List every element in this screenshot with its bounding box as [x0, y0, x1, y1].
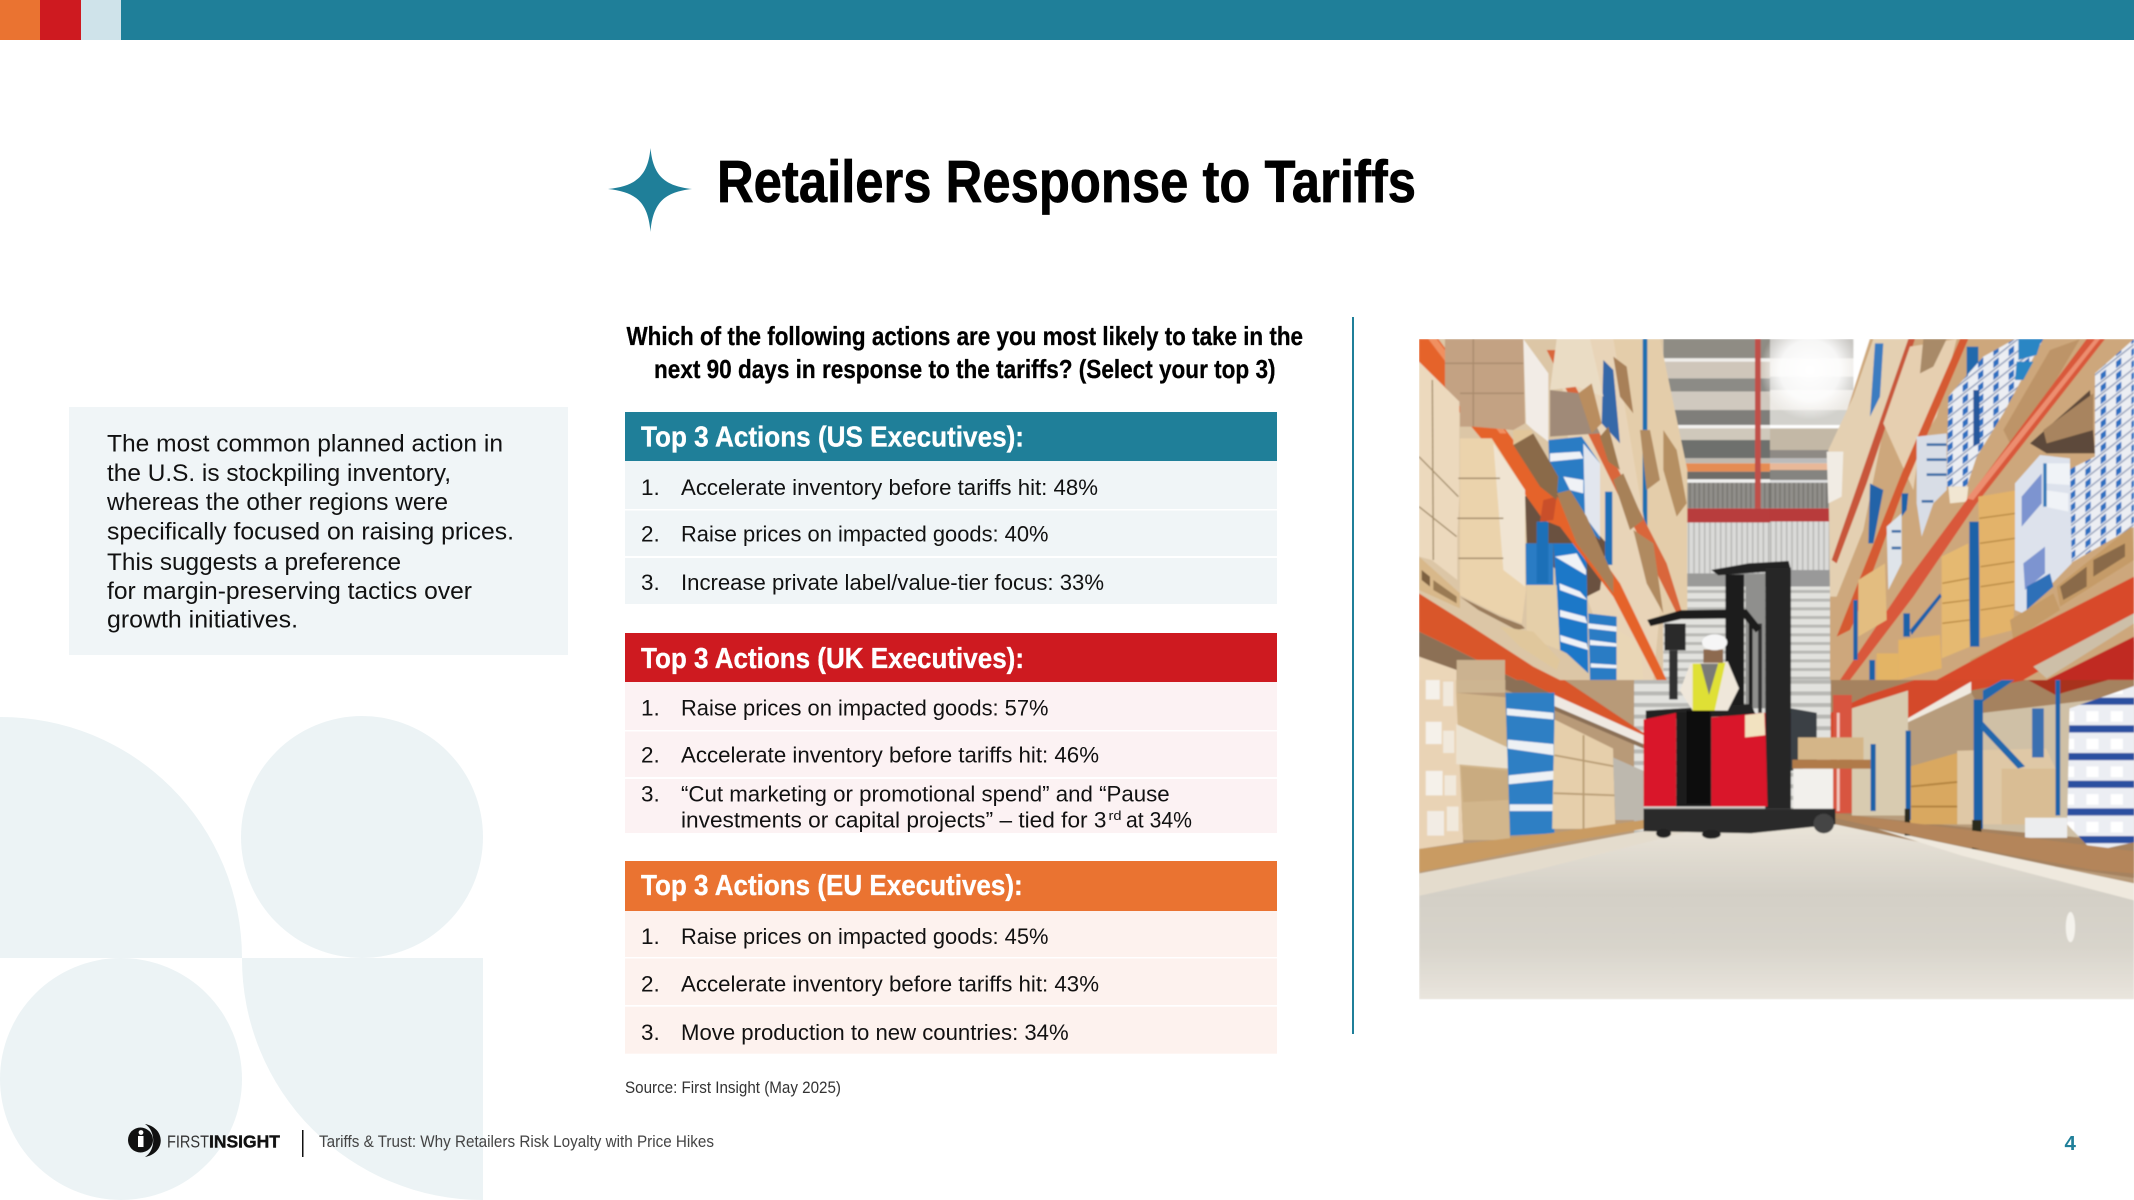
- top colour bar: [0, 0, 2134, 40]
- takeaway text: specifically focused on raising prices.: [107, 519, 514, 545]
- panel: UK executives: rd: [1108, 808, 1122, 823]
- footer logo: First Insight: INSIGHT: [209, 1132, 280, 1152]
- floor and lower racks: [1419, 628, 2134, 999]
- footer text: Tariffs & Trust: Why Retailers Risk Loyalty with Price Hikes: [319, 1133, 714, 1151]
- panel: EU executives: Top 3 Actions (EU Executives):: [641, 870, 1023, 902]
- survey question: Which of the following actions are you most likely to take in the: [626, 321, 1303, 351]
- panel: US executives: 2.: [641, 522, 660, 547]
- panel: US executives: Increase private label/value-tier focus: 33%: [681, 570, 1104, 595]
- background decorative shapes: [0, 716, 483, 1200]
- panel: key takeaway: [69, 407, 568, 655]
- takeaway text: the U.S. is stockpiling inventory,: [107, 461, 451, 487]
- footer logo: First Insight: [128, 1124, 280, 1157]
- panel: UK executives: Raise prices on impacted goods: 57%: [681, 696, 1048, 721]
- takeaway text: whereas the other regions were: [106, 490, 448, 516]
- panel: UK executives: 3.: [641, 782, 660, 807]
- takeaway text: growth initiatives.: [107, 608, 298, 634]
- panel: EU executives: Raise prices on impacted goods: 45%: [681, 924, 1048, 949]
- forklift and operator: [1643, 561, 1871, 839]
- title: Retailers Response to Tariffs: [717, 149, 1416, 215]
- panel: EU executives: [625, 861, 1277, 1054]
- panel: UK executives: [625, 633, 1277, 833]
- vertical divider line: [1352, 317, 1354, 1034]
- panel: UK executives: 2.: [641, 743, 660, 768]
- icon: four-point star: [608, 148, 692, 232]
- takeaway text: The most common planned action in: [107, 432, 503, 458]
- panel: US executives: Top 3 Actions (US Executives):: [641, 422, 1024, 454]
- panel: EU executives: 1.: [641, 924, 660, 949]
- panel: UK executives: Accelerate inventory before tariffs hit: 46%: [681, 743, 1099, 768]
- footer divider: [302, 1130, 304, 1157]
- left racks: [1419, 339, 1770, 680]
- panel: EU executives: Accelerate inventory before tariffs hit: 43%: [681, 972, 1099, 997]
- panel: US executives: [625, 412, 1277, 604]
- takeaway text: This suggests a preference: [107, 550, 401, 576]
- panel: US executives: 1.: [641, 475, 660, 500]
- source note: Source: First Insight (May 2025): [625, 1079, 841, 1097]
- right racks: [1760, 320, 2134, 680]
- panel: US executives: Accelerate inventory before tariffs hit: 48%: [681, 475, 1098, 500]
- panel: EU executives: 3.: [641, 1020, 660, 1045]
- panel: EU executives: Move production to new countries: 34%: [681, 1020, 1069, 1045]
- panel: UK executives: at 34%: [1126, 808, 1192, 833]
- takeaway text: [106, 432, 514, 634]
- photo: warehouse aisle with forklift: [1419, 320, 2134, 999]
- panel: UK executives: “Cut marketing or promotional spend” and “Pause: [681, 782, 1170, 807]
- panel: US executives: Raise prices on impacted goods: 40%: [681, 522, 1048, 547]
- panel: UK executives: Top 3 Actions (UK Executives):: [641, 643, 1024, 675]
- takeaway text: for margin-preserving tactics over: [107, 579, 472, 605]
- survey question: [626, 321, 1303, 384]
- panel: UK executives: investments or capital projects” – tied for 3: [681, 808, 1106, 833]
- footer logo: First Insight: FIRST: [167, 1132, 209, 1152]
- panel: UK executives: 1.: [641, 696, 660, 721]
- page number: 4: [2064, 1132, 2076, 1155]
- survey question: next 90 days in response to the tariffs? (Select your top 3): [654, 354, 1276, 384]
- panel: EU executives: 2.: [641, 972, 660, 997]
- panel: US executives: 3.: [641, 570, 660, 595]
